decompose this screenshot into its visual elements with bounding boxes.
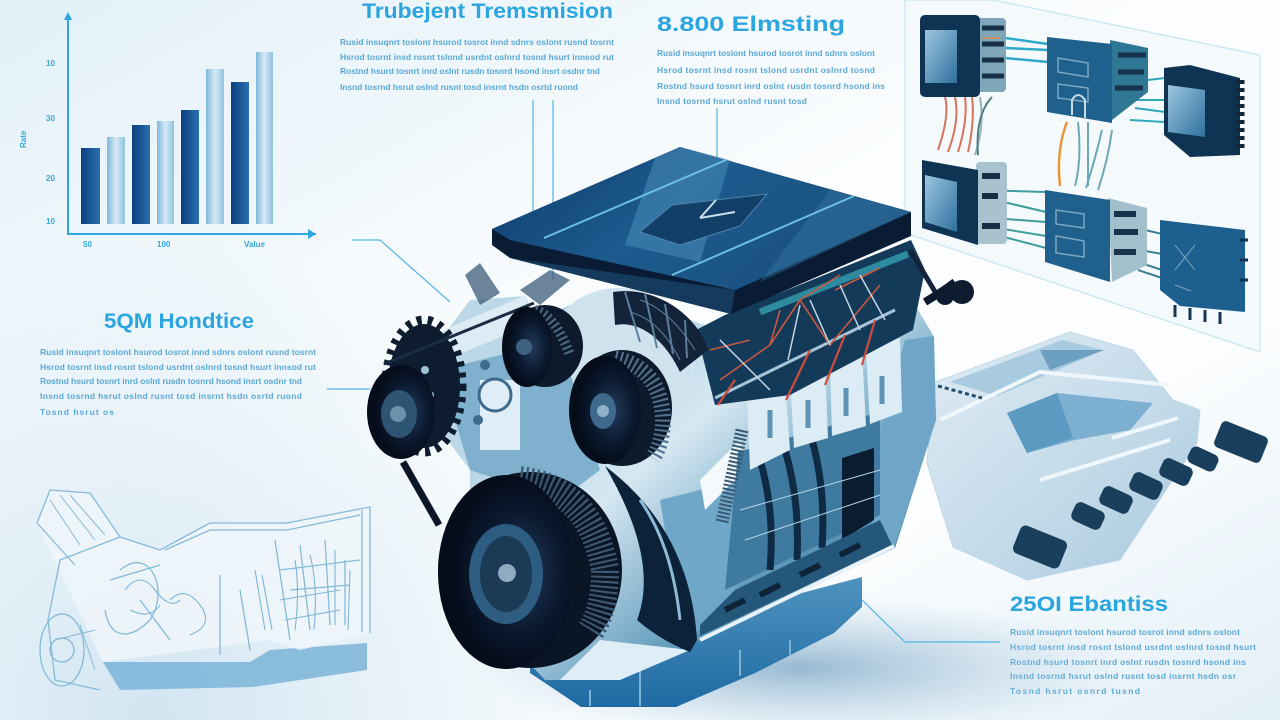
bar chart: Value (244, 240, 265, 249)
bar chart: Rate (19, 130, 28, 148)
bar chart (19, 12, 316, 249)
text block: bottom right callout (1010, 627, 1256, 696)
transmission housing (927, 332, 1269, 580)
text block: left callout: Rusid insuqnrt toslont hsurod tosrot innd sdnrs oslont rusnd tosrnt (40, 347, 316, 357)
pulley: crankshaft (438, 472, 622, 669)
engine block (470, 280, 936, 680)
text block: transmission: Insnd tosrnd hsrut oslnd rusnt tosd insrnt hsdn osrtd ruond (340, 82, 578, 92)
text block: left callout (40, 347, 316, 417)
pulley: alternator (367, 365, 435, 459)
text block: bottom right callout: Rusid insuqnrt toslont hsurod tosrot innd sdnrs oslont (1010, 627, 1240, 637)
text block: electric: Rusid insuqnrt toslont hsurod tosrot innd sdnrs oslont (657, 48, 875, 58)
heading: electric: 8.800 Elmsting (657, 13, 845, 36)
heading: left callout: 5QM Hondtice (104, 310, 254, 333)
heading: transmission: Trubejent Tremsmision (362, 0, 613, 23)
text block: left callout: Insnd tosrnd hsrut oslnd rusnt tosd insrnt hsdn osrtd ruond (40, 391, 302, 401)
ribbed coil (613, 291, 708, 372)
crescent guard (605, 466, 697, 652)
text block: electric: Insnd tosrnd hsrut oslnd rusnt tosd (657, 96, 807, 106)
text block: electric (657, 48, 885, 106)
timing strip (722, 430, 742, 522)
lower crankcase (700, 520, 892, 636)
text block: bottom right callout: Hsrod tosrnt insd rosnt tslond usrdnt oslnrd tosnd hsurt (1010, 642, 1256, 652)
text block: electric: Hsrod tosrnt insd rosnt tslond usrdnt oslnrd tosnd (657, 65, 875, 75)
cover lid (492, 147, 911, 314)
engine ground shadow (470, 596, 1130, 720)
chip modules (920, 15, 1248, 324)
top bracket (465, 263, 570, 305)
bar chart: 100 (157, 240, 171, 249)
bar chart: 20 (46, 174, 55, 183)
mid-tone shading (660, 480, 740, 640)
text block: left callout: Rostnd hsurd tosnrt inrd oslnt rusdn tosnrd hsond insrt osdnr tnd (40, 376, 302, 386)
bar chart: 10 (46, 217, 55, 226)
belts (384, 303, 534, 364)
wires (938, 38, 1165, 278)
text block: bottom right callout: Rostnd hsurd tosnrt inrd oslnt rusdn tosnrd hsond ins (1010, 657, 1246, 667)
blueprint sketch (37, 490, 370, 690)
front components (367, 263, 742, 669)
connectors (1011, 420, 1269, 570)
pulley: small (502, 305, 583, 387)
heading: bottom right callout: 25OI Ebantiss (1010, 593, 1168, 616)
text block: bottom right callout: Insnd tosrnd hsrut oslnd rusnt tosd insrnt hsdn osr (1010, 671, 1237, 681)
right end of block (870, 336, 936, 555)
pan rail (700, 546, 894, 640)
oil pan (530, 577, 862, 707)
bar chart: 30 (46, 114, 55, 123)
text block: bottom right callout: Tosnd hsrut osnrd tusnd (1010, 686, 1140, 696)
text block: left callout: Tosnd hsrut os (40, 407, 114, 417)
engine (367, 147, 974, 707)
text block: electric: Rostnd hsurd tosnrt inrd oslnt rusdn tosnrd hsond ins (657, 81, 885, 91)
leader lines (327, 100, 1000, 642)
pulley: middle (569, 350, 672, 466)
wiring diagram panel (905, 0, 1260, 352)
text block: transmission (340, 37, 614, 92)
lower cylinder ribs (725, 412, 880, 590)
text block: left callout: Hsrod tosrnt insd rosnt tslond usrdnt oslnrd tosnd hsurt innsod rut (40, 362, 316, 372)
bar chart: 50 (83, 240, 92, 249)
text block: transmission: Rusid insuqnrt toslont hsurod tosrot innd sdnrs oslont rusnd tosrnt (340, 37, 614, 47)
silver housing (440, 340, 600, 500)
valve area and wiring (696, 240, 974, 405)
gear (388, 324, 460, 448)
silver ring disc (542, 288, 694, 440)
cylinder head bricks (747, 338, 902, 470)
text block: transmission: Rostnd hsurd tosnrt inrd oslnt rusdn tosnrd hsond insrt osdnr tnd (340, 66, 600, 76)
text block: transmission: Hsrod tosrnt insd rosnt tslond usrdnt oslnrd tosnd hsurt innsod rut (340, 52, 614, 62)
bar chart: 10 (46, 59, 55, 68)
